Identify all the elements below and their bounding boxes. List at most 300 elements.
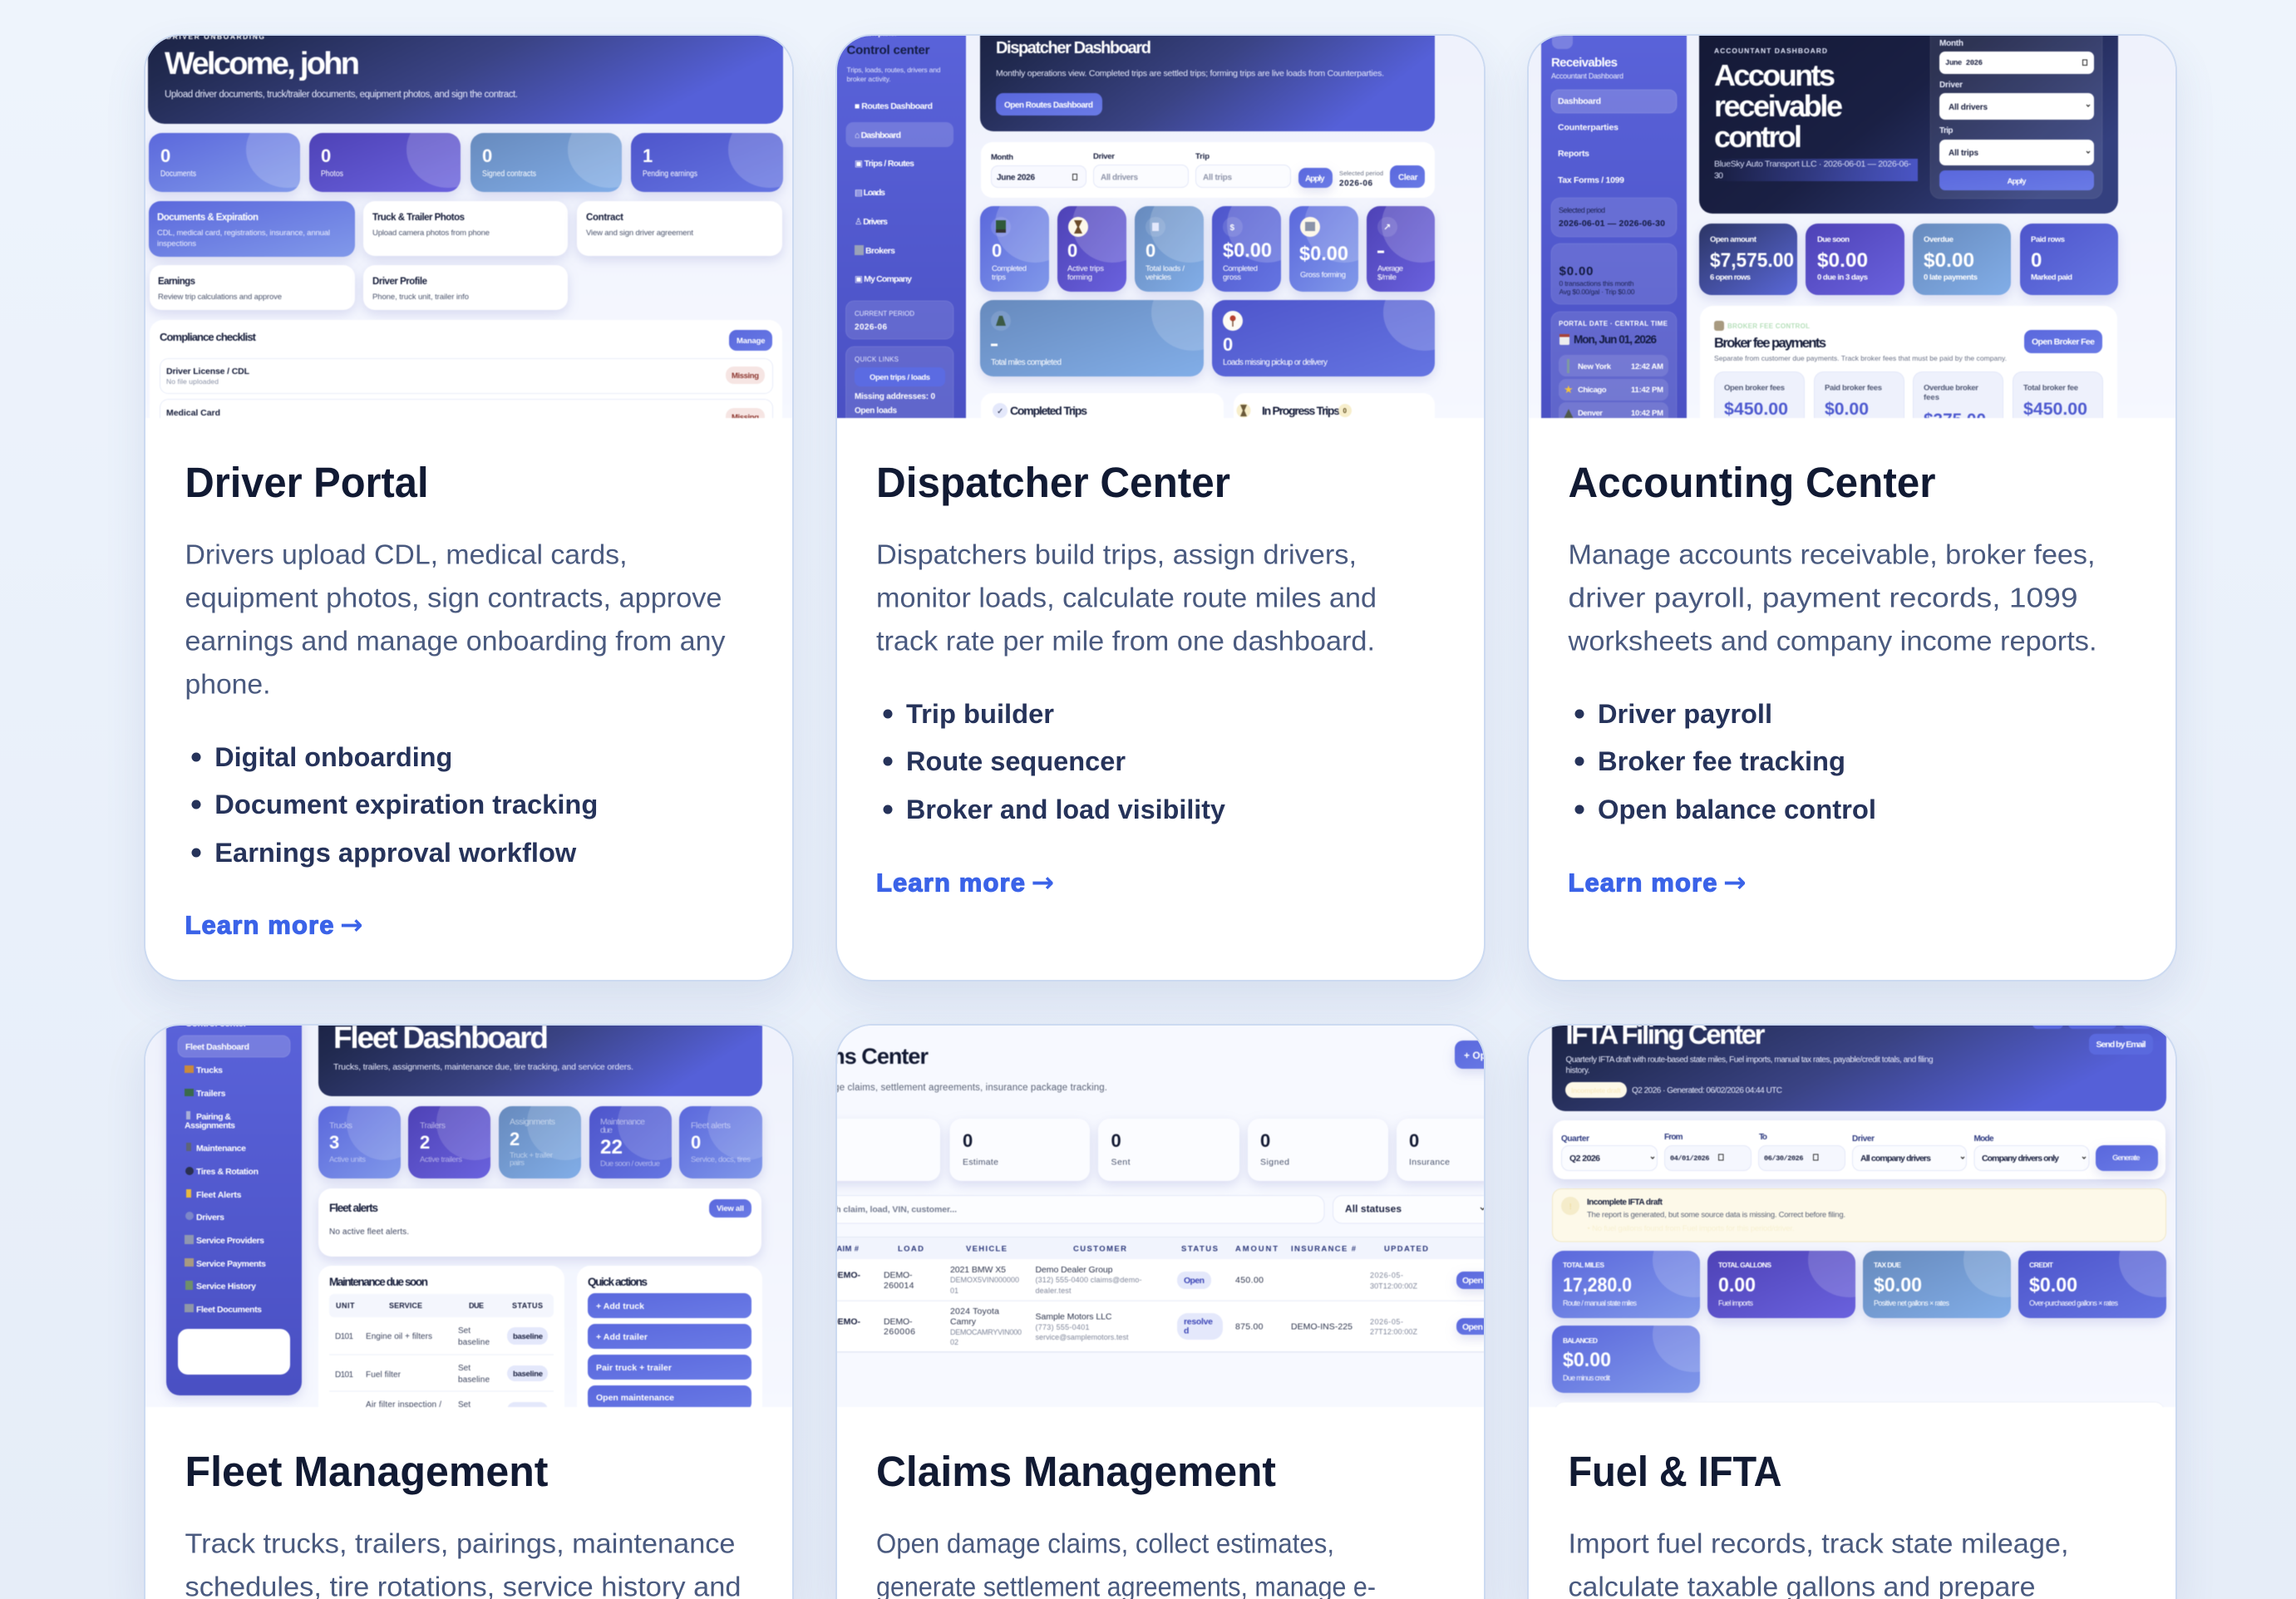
sidebar: Accountant Dashboard [1551, 71, 1623, 80]
hero banner: accounts receivable control: All drivers [1949, 103, 1988, 112]
heading: Claims Management [876, 1448, 1276, 1495]
screenshot: driver onboarding dashboard [145, 35, 792, 419]
KPI tiles row one: Completed [992, 264, 1027, 273]
maintenance due table [318, 1266, 564, 1424]
sidebar: ♙ Drivers [855, 217, 888, 227]
hero banner: accounts receivable control: Apply [2007, 177, 2027, 186]
fleet alerts panel: No active fleet alerts. [329, 1228, 409, 1237]
maintenance due table: Set [458, 1326, 471, 1336]
filter bar: To [1759, 1133, 1767, 1142]
KPI tiles: TAX DUE [1874, 1261, 1901, 1269]
quick actions: Pair truck + trailer [596, 1363, 672, 1373]
quick actions: + Add trailer [596, 1332, 648, 1342]
description [185, 539, 726, 700]
KPI tiles: Route / manual state miles [1563, 1299, 1638, 1307]
claims table: UPDATED [1384, 1245, 1428, 1253]
card text: Dispatcher Center [876, 459, 1377, 898]
filter bar: All trips [1203, 173, 1232, 183]
sidebar: Service Payments [196, 1259, 266, 1269]
stat tiles: 0 [321, 145, 331, 166]
claims table: DEMOCAMRYVIN000 [950, 1328, 1022, 1336]
quick actions: + Add truck [596, 1301, 644, 1311]
hero banner [1552, 999, 2166, 1111]
description [185, 1528, 742, 1599]
sidebar: Service History [196, 1282, 256, 1292]
KPI tiles: Paid rows [2031, 235, 2065, 244]
description: earnings and manage onboarding from any [185, 625, 726, 657]
feature list: Open balance control [1598, 795, 1876, 824]
sidebar: ⌂ Dashboard [855, 130, 901, 140]
KPI tiles: 3 [329, 1132, 339, 1153]
compliance checklist: Driver License / CDL [166, 367, 250, 376]
KPI tiles: Service, docs, tires [691, 1155, 751, 1164]
card text: Driver Portal [185, 459, 726, 941]
sidebar: Pairing & [196, 1112, 231, 1122]
compliance checklist: No file uploaded [166, 377, 219, 386]
panel: Dispatcher Center card [835, 34, 1486, 982]
KPI tiles: Active trailers [420, 1155, 462, 1164]
claims table: VEHICLE [966, 1245, 1007, 1253]
hero banner: Monthly operations view. Completed trips are settled trips; forming trips are live loads from Counterparties. [996, 68, 1384, 78]
claims table: 27T12:00:00Z [1370, 1328, 1418, 1336]
sidebar: Trucks [196, 1065, 223, 1075]
claims table: DEMO- [884, 1270, 913, 1280]
feature list: Driver payroll [1598, 699, 1772, 729]
KPI tiles: 0 [2031, 249, 2042, 272]
fleet alerts panel [318, 1188, 761, 1257]
KPI tiles: Over-purchased gallons × rates [2029, 1299, 2118, 1307]
claims table: 875.00 [1235, 1321, 1264, 1331]
status tiles: Estimate [963, 1157, 998, 1167]
KPI tiles: $0.00 [1563, 1349, 1611, 1371]
screenshot: IFTA filing center [1529, 1024, 2175, 1407]
link: learn more: Learn more [185, 911, 334, 939]
action cards: Truck & Trailer Photos [372, 213, 465, 223]
claims table: Open [1462, 1276, 1483, 1286]
incomplete draft alert: • No fuel gallons found from Fuel imports for this period/driver. [1588, 1224, 1794, 1233]
filter bar: 04/01/2026 [1670, 1154, 1709, 1163]
hero banner: accounts receivable control: June 2026 [1945, 59, 1983, 67]
claims table: Open [1184, 1276, 1205, 1286]
KPI tiles row one: Total loads / [1146, 264, 1185, 273]
maintenance due table: D101 [335, 1332, 353, 1341]
maintenance due table: baseline [513, 1332, 543, 1341]
sidebar: broker activity. [846, 75, 891, 83]
stat tiles [149, 111, 811, 192]
action cards: CDL, medical card, registrations, insurance, annual [157, 229, 330, 238]
description [876, 539, 1377, 657]
sidebar: Maintenance [196, 1144, 246, 1154]
hero banner: welcome: Welcome, john [165, 47, 360, 81]
sidebar: Counterparties [1558, 123, 1619, 133]
filter bar: Clear [1398, 173, 1418, 183]
maintenance due table: Set [458, 1364, 471, 1373]
sidebar: ▣ Trips / Routes [855, 159, 914, 169]
incomplete draft alert: The report is generated, but some source data is missing. Correct before filing. [1587, 1210, 1845, 1220]
feature list: Document expiration tracking [214, 790, 598, 819]
hero banner: Q2 2026 · Generated: 06/02/2026 04:44 UTC [1632, 1086, 1782, 1095]
panel: Claims Management card [835, 1024, 1486, 1599]
broker fee panel [1700, 306, 2117, 439]
hero banner: Incomplete draft [1571, 1086, 1621, 1095]
maintenance due table: UNIT [336, 1301, 355, 1310]
KPI tiles: Active units [329, 1155, 366, 1164]
card text: Fuel and IFTA [1568, 1448, 2068, 1599]
heading: Driver Portal [185, 459, 429, 506]
sidebar: ▣ My Company [855, 274, 912, 284]
link: learn more: → [1723, 866, 1747, 898]
quick actions [577, 1266, 762, 1424]
hero banner: welcome [148, 10, 783, 124]
filter bar: Generate [2112, 1154, 2140, 1163]
filter bar: All drivers [1101, 173, 1138, 183]
search and status filter: All statuses [1345, 1203, 1402, 1215]
trip cards: ✓ [997, 407, 1003, 416]
heading: Accounting Center [1568, 459, 1936, 506]
sidebar: Avg $0.00/gal · Trip $0.00 [1559, 288, 1635, 296]
sidebar: New York [1578, 362, 1612, 371]
KPI tiles: Fleet alerts [691, 1120, 731, 1130]
trip cards: Completed Trips [1010, 404, 1087, 417]
claims table: 260014 [884, 1281, 914, 1291]
hero banner: accounts receivable control: Trip [1939, 126, 1954, 135]
action cards: Earnings [158, 277, 195, 287]
sidebar: Drivers [196, 1213, 224, 1223]
filter bar: Apply [1305, 175, 1325, 184]
KPI tiles: TOTAL MILES [1563, 1261, 1604, 1269]
hero banner: accounts receivable control: Month [1939, 39, 1963, 48]
incomplete draft alert: Incomplete IFTA draft [1587, 1198, 1663, 1207]
lower panel [1554, 1402, 2165, 1427]
hero banner: Send by Email [2096, 1040, 2146, 1050]
claims table: Demo Dealer Group [1036, 1265, 1113, 1275]
KPI tiles: 0 due in 3 days [1817, 273, 1868, 283]
KPI tiles: TOTAL GALLONS [1718, 1261, 1771, 1269]
sidebar: Chicago [1578, 386, 1607, 395]
description: worksheets and company income reports. [1567, 625, 2096, 657]
filter bar: Selected period [1339, 170, 1383, 177]
KPI tiles row one: Active trips [1067, 264, 1104, 273]
KPI tiles [1699, 224, 2118, 295]
hero banner: accounts receivable control: BlueSky Auto Transport LLC · 2026-06-01 — 2026-06- [1714, 160, 1912, 170]
claims table: 2026-05- [1370, 1272, 1403, 1280]
sidebar: QUICK LINKS [855, 356, 899, 363]
heading: Fuel & IFTA [1568, 1448, 1782, 1495]
hero banner: accounts receivable control: Driver [1939, 81, 1963, 90]
filter bar: Mode [1973, 1134, 1994, 1144]
filter bar: 06/30/2026 [1764, 1154, 1804, 1163]
hero banner: Trucks, trailers, assignments, maintenance due, tire tracking, and service orders. [333, 1062, 633, 1072]
KPI tiles [318, 1085, 784, 1178]
KPI tiles: 0 late payments [1924, 273, 1978, 283]
hero banner: accounts receivable control: All trips [1949, 149, 1978, 158]
KPI tiles: 22 [600, 1136, 623, 1159]
maintenance due table: DUE [469, 1301, 484, 1310]
KPI tiles: 2 [510, 1129, 520, 1149]
description: Drivers upload CDL, medical cards, [185, 539, 627, 570]
sidebar: Open loads [855, 406, 897, 416]
description: monitor loads, calculate route miles and [876, 582, 1377, 613]
KPI tiles row one: 0 [992, 240, 1002, 261]
description: phone. [185, 668, 271, 700]
feature list [1574, 699, 1876, 824]
screenshot: dispatcher dashboard [837, 35, 1484, 419]
quick actions: Open maintenance [596, 1393, 674, 1403]
claims table: 2021 BMW X5 [950, 1265, 1006, 1275]
trip cards: In Progress Trips [1262, 404, 1340, 417]
claims table: 2024 Toyota [950, 1306, 999, 1316]
panel: Accounting Center card [1527, 34, 2177, 982]
sidebar: Mon, Jun 01, 2026 [1574, 333, 1657, 346]
filter bar: 2026-06 [1339, 180, 1372, 188]
KPI tiles: Trailers [420, 1120, 446, 1130]
claims table: (312) 555-0400 claims@demo- [1036, 1276, 1142, 1284]
claims table: LOAD [898, 1245, 924, 1253]
sidebar: PORTAL DATE · CENTRAL TIME [1559, 320, 1668, 327]
maintenance due table: baseline [458, 1375, 490, 1385]
maintenance due table: D101 [335, 1370, 353, 1380]
description: Dispatchers build trips, assign drivers, [876, 539, 1357, 570]
claims table: 01 [950, 1287, 958, 1295]
sidebar: 0 transactions this month [1559, 279, 1634, 288]
panel: Driver Portal card [144, 34, 794, 982]
claims table: Camry [950, 1316, 977, 1326]
sidebar: $0.00 [1559, 264, 1593, 278]
claims table: AMOUNT [1235, 1245, 1278, 1253]
sidebar: 12:42 AM [1631, 362, 1663, 371]
filter bar: Driver [1093, 152, 1115, 161]
KPI tiles: due [600, 1125, 613, 1135]
action cards: Driver Profile [372, 277, 427, 287]
maintenance due table: STATUS [512, 1301, 543, 1310]
sidebar: Fleet Alerts [196, 1190, 242, 1200]
KPI tiles row one: ↗ [1383, 223, 1391, 233]
maintenance due table: SERVICE [389, 1301, 422, 1310]
stat tiles: 1 [643, 145, 653, 166]
feature list: Route sequencer [906, 746, 1126, 776]
filter bar: Driver [1852, 1134, 1875, 1144]
sidebar: Tax Forms / 1099 [1558, 175, 1624, 185]
trip cards [981, 393, 1435, 443]
sidebar: ▤ Loads [855, 188, 885, 198]
maintenance due table: Fuel filter [366, 1370, 402, 1380]
sidebar: CURRENT PERIOD [855, 310, 914, 317]
hero banner: accounts receivable control: control [1714, 120, 1802, 154]
KPI tiles: 0.00 [1718, 1274, 1756, 1296]
link: learn more: Learn more [876, 868, 1025, 898]
broker fee panel: BROKER FEE CONTROL [1727, 322, 1810, 330]
stat tiles: Photos [321, 170, 343, 179]
description: Import fuel records, track state mileage, [1568, 1528, 2068, 1559]
link: learn more: Learn more [1568, 868, 1717, 898]
feature list [191, 742, 598, 868]
KPI tiles: $7,575.00 [1710, 249, 1794, 272]
KPI tiles [1552, 1223, 2202, 1393]
action cards: Phone, truck unit, trailer info [372, 293, 469, 302]
sidebar: Trips, loads, routes, drivers and [846, 66, 941, 74]
KPI tiles: $0.00 [2029, 1274, 2077, 1296]
sidebar: Reports [1558, 149, 1589, 159]
claims table: d [1184, 1326, 1189, 1336]
sidebar [166, 1007, 302, 1395]
quick actions: Quick actions [588, 1276, 648, 1288]
KPI tiles: Maintenance [600, 1117, 645, 1127]
KPI tiles: Fuel imports [1718, 1299, 1754, 1307]
action cards: Documents & Expiration [157, 213, 259, 223]
claims table: 2026-05- [1370, 1318, 1403, 1326]
broker fee panel: fees [1924, 393, 1939, 402]
description: equipment photos, sign contracts, approve [185, 582, 722, 613]
claims table: service@samplemotors.test [1036, 1333, 1129, 1341]
hero banner: accounts receivable control: ACCOUNTANT DASHBOARD [1714, 47, 1827, 55]
maintenance due table: baseline [513, 1370, 543, 1379]
link: learn more: → [1031, 866, 1054, 898]
action cards: Review trip calculations and approve [158, 293, 282, 302]
screenshot: accountant dashboard [1529, 36, 2175, 419]
maintenance due table: Engine oil + filters [366, 1332, 432, 1341]
filter bar: Month [991, 153, 1013, 162]
KPI tiles row one: $/mile [1377, 273, 1397, 283]
hero banner: Dispatcher Dashboard [996, 39, 1151, 57]
sidebar: Dashboard [1558, 96, 1601, 106]
filter bar: Trip [1195, 152, 1210, 161]
claims table [825, 1237, 1498, 1353]
KPI tiles: $0.00 [1817, 249, 1868, 272]
KPI tiles: 0 [691, 1132, 701, 1153]
sidebar [1541, 27, 1687, 436]
status tiles [803, 1119, 1496, 1181]
broker fee panel: Open broker fees [1724, 384, 1785, 392]
hero banner [318, 999, 762, 1096]
KPI tiles row two: 0 [1223, 334, 1233, 355]
sidebar: Receivables [1551, 56, 1618, 70]
heading: Fleet Management [185, 1448, 549, 1495]
action cards: Contract [586, 213, 623, 223]
KPI tiles: CREDIT [2029, 1261, 2054, 1269]
panel: Fuel and IFTA card [1527, 1024, 2177, 1599]
stat tiles: Documents [160, 170, 196, 179]
fleet alerts panel: View all [717, 1204, 744, 1213]
filter bar [1553, 1120, 2165, 1179]
sidebar: 2026-06-01 — 2026-06-30 [1559, 219, 1665, 229]
action cards: View and sign driver agreement [586, 229, 693, 238]
sidebar: Control center [846, 43, 930, 57]
KPI tiles: Marked paid [2031, 273, 2072, 283]
hero banner: accounts receivable control: Accounts [1714, 58, 1835, 92]
card text: Accounting Center [1567, 459, 2096, 898]
claims table: dealer.test [1036, 1287, 1072, 1295]
incomplete draft alert [1553, 1188, 2166, 1242]
action cards: Upload camera photos from phone [372, 229, 490, 238]
KPI tiles row one: Average [1377, 264, 1403, 273]
claims table: (773) 555-0401 [1036, 1323, 1089, 1331]
KPI tiles: 17,280.0 [1563, 1274, 1632, 1296]
claims table: CUSTOMER [1073, 1245, 1126, 1253]
description [1567, 539, 2096, 657]
description: track rate per mile from one dashboard. [876, 625, 1375, 657]
action cards: inspections [157, 239, 196, 248]
maintenance due table: baseline [458, 1338, 490, 1347]
KPI tiles: Assignments [510, 1117, 555, 1127]
KPI tiles row one [980, 186, 1461, 292]
KPI tiles: $0.00 [1924, 249, 1974, 272]
feature list: Earnings approval workflow [214, 838, 577, 868]
status tiles: Sent [1111, 1157, 1131, 1167]
panel: Fleet Management card [144, 1024, 794, 1599]
stat tiles: Signed contracts [482, 170, 536, 179]
sidebar: Trailers [196, 1089, 226, 1099]
action cards [149, 201, 782, 310]
fleet alerts panel: Fleet alerts [329, 1202, 378, 1214]
claims table: Sample Motors LLC [1036, 1311, 1112, 1321]
sidebar: Open trips / loads [870, 373, 930, 382]
feature list: Broker and load visibility [906, 795, 1225, 824]
hero banner: Quarterly IFTA draft with route-based state miles, Fuel imports, manual tax rates, payable/credit totals, and filing [1566, 1055, 1934, 1065]
sidebar: Brokers [865, 246, 895, 256]
hero banner: accounts receivable control [1699, 10, 2118, 214]
screenshot: claims center [836, 1026, 1485, 1353]
KPI tiles: pairs [510, 1159, 525, 1168]
KPI tiles: Truck + trailer [510, 1151, 553, 1160]
compliance checklist: Medical Card [166, 408, 220, 418]
KPI tiles row two: Loads missing pickup or delivery [1223, 358, 1328, 367]
claims table: STATUS [1181, 1245, 1218, 1253]
sidebar: 10:42 PM [1631, 409, 1663, 418]
KPI tiles: Trucks [329, 1120, 352, 1130]
status tiles: 0 [1409, 1130, 1419, 1151]
sidebar: Missing addresses: 0 [855, 392, 935, 401]
KPI tiles row two: Total miles completed [991, 358, 1062, 367]
status tiles: 0 [1111, 1130, 1121, 1151]
sidebar: Assignments [185, 1120, 235, 1130]
description: Manage accounts receivable, broker fees, [1568, 539, 2095, 570]
claims table: DEMOX5VIN000000 [950, 1276, 1019, 1284]
feature list: Trip builder [906, 699, 1054, 729]
KPI tiles row one: $0.00 [1223, 239, 1272, 262]
compliance checklist: Manage [737, 337, 765, 346]
stat tiles: Pending earnings [643, 170, 697, 179]
claims table: 02 [950, 1338, 958, 1346]
hero banner: Open Routes Dashboard [1004, 101, 1093, 110]
feature list [883, 699, 1225, 824]
sidebar: Fleet Dashboard [185, 1042, 249, 1052]
incomplete draft alert: ! [1569, 1203, 1572, 1212]
hero banner [980, 10, 1435, 131]
filter bar: June 2026 [997, 173, 1035, 183]
feature list: Digital onboarding [214, 742, 452, 772]
hero banner: welcome: Upload driver documents, truck/trailer documents, equipment photos, and sign the contract. [165, 90, 518, 100]
claims table: resolve [1184, 1316, 1213, 1326]
sidebar: Denver [1578, 409, 1603, 418]
description [876, 1528, 1376, 1599]
sidebar: 11:42 PM [1631, 386, 1663, 395]
card text: Claims Management [876, 1448, 1376, 1599]
sidebar: Tires & Rotation [196, 1167, 259, 1177]
filter bar: Company drivers only [1982, 1154, 2059, 1164]
KPI tiles row two [980, 274, 1466, 376]
link: learn more: → [340, 908, 363, 941]
description: Open damage claims, collect estimates, [876, 1528, 1334, 1559]
status tiles: Insurance [1409, 1157, 1450, 1167]
KPI tiles row one: Gross forming [1300, 271, 1346, 279]
filter bar: Quarter [1561, 1134, 1589, 1144]
maintenance due table: Maintenance due soon [329, 1276, 428, 1288]
sidebar: Fleet Documents [196, 1305, 262, 1315]
claims table: 30T12:00:00Z [1370, 1282, 1418, 1290]
compliance checklist [150, 320, 782, 453]
filter bar: From [1664, 1133, 1683, 1142]
hero banner: history. [1566, 1066, 1589, 1075]
